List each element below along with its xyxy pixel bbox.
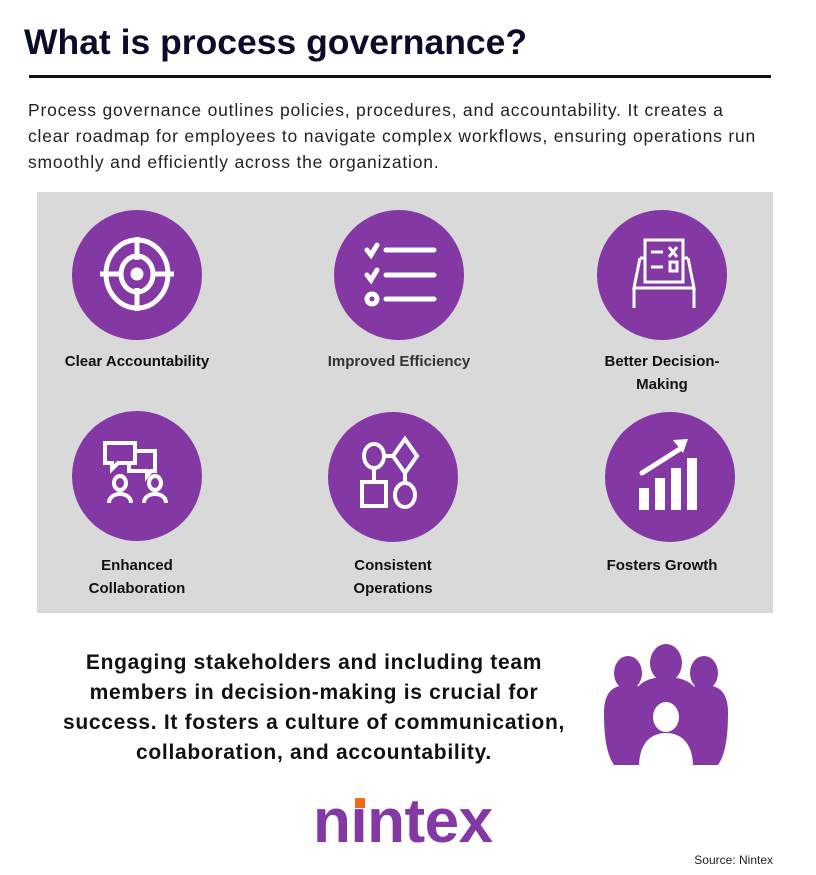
label: fosters growth: Fosters Growth (607, 557, 717, 574)
callout text: collaboration, and accountability. (136, 741, 492, 764)
icon: collaboration (72, 411, 202, 541)
logo accent square (355, 798, 365, 808)
label: better decision-making (604, 353, 720, 393)
icon: people group (604, 644, 728, 765)
icon: target (72, 210, 202, 340)
label: better decision-making: Better Decision- (604, 353, 720, 370)
label: enhanced collaboration: Enhanced (101, 557, 173, 574)
icon: ballot box (597, 210, 727, 340)
label: improved efficiency: Improved Efficiency (328, 353, 470, 370)
icon: checklist (334, 210, 464, 340)
callout text: members in decision-making is crucial for (90, 681, 538, 704)
label: enhanced collaboration: Collaboration (89, 580, 185, 597)
label: consistent operations: Operations (353, 580, 433, 597)
label: better decision-making: Making (636, 376, 688, 393)
icon: flowchart (328, 412, 458, 542)
divider (29, 75, 771, 78)
label: enhanced collaboration (89, 557, 185, 597)
callout text (63, 651, 565, 764)
intro text: smoothly and efficiently across the organization. (28, 152, 439, 172)
panel: benefits (37, 192, 773, 613)
intro text (28, 100, 756, 172)
callout text: success. It fosters a culture of communication, (63, 711, 565, 734)
label: consistent operations (353, 557, 433, 597)
callout text: Engaging stakeholders and including team (86, 651, 542, 674)
intro text: clear roadmap for employees to navigate complex workflows, ensuring operations run (28, 126, 756, 146)
icon: growth chart (605, 412, 735, 542)
label: consistent operations: Consistent (354, 557, 432, 574)
intro text: Process governance outlines policies, procedures, and accountability. It creates a (28, 100, 724, 120)
source: Source: Nintex (694, 853, 773, 867)
logo: nintex: nıntex (313, 787, 493, 856)
title: What is process governance? (24, 22, 527, 62)
label: clear accountability: Clear Accountability (65, 353, 209, 370)
